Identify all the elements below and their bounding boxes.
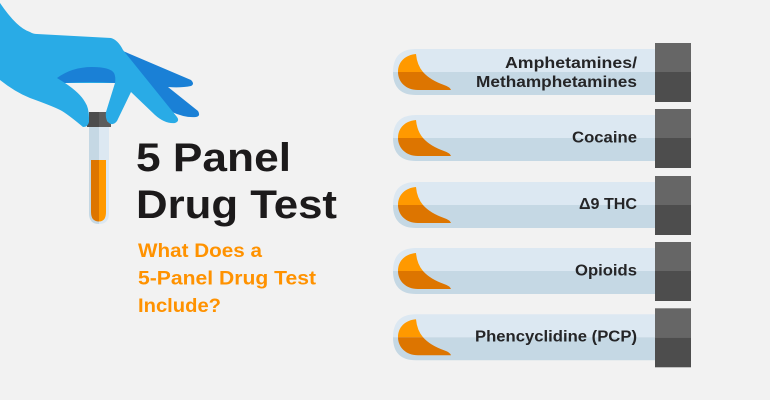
- icon: cap: [655, 109, 691, 138]
- icon: orange liquid: [398, 187, 423, 205]
- subtitle: [138, 240, 317, 317]
- icon: cap: [655, 308, 691, 337]
- panel: Cocaine: [393, 109, 691, 168]
- icon: orange liquid: [398, 319, 423, 337]
- label: Phencyclidine (PCP): [475, 329, 637, 346]
- icon: inner glove shadow: [57, 67, 115, 83]
- icon: tube body: [393, 314, 655, 337]
- icon: orange liquid: [398, 253, 423, 271]
- icon: back fingers of glove: [123, 51, 199, 117]
- subtitle: What Does a: [138, 240, 262, 262]
- panel: Amphetamines / Methamphetamines: Methamphetamines: [476, 74, 637, 91]
- icon: tube body: [393, 182, 655, 205]
- icon: cap: [655, 176, 691, 205]
- panel: Opioids: [393, 242, 691, 301]
- label: Δ9 THC: [579, 196, 637, 213]
- icon: orange liquid: [398, 120, 423, 138]
- icon: cap: [655, 242, 691, 271]
- label: Opioids: [575, 263, 637, 280]
- subtitle: 5-Panel Drug Test: [138, 268, 317, 290]
- panel: Phencyclidine (PCP): [393, 308, 691, 367]
- title line 2: Drug Test: [136, 183, 337, 227]
- icon: tube body: [393, 248, 655, 271]
- panel: THC: [393, 176, 691, 235]
- icon: orange liquid: [398, 54, 423, 72]
- panel: Amphetamines / Methamphetamines: [393, 43, 691, 102]
- icon: test tube: [87, 112, 111, 224]
- icon: tube body: [393, 49, 655, 72]
- subtitle: Include?: [138, 295, 221, 317]
- label: Amphetamines/: [505, 55, 638, 72]
- title: 5 Panel: [136, 136, 291, 180]
- illustration: gloved hand holding test tube: [0, 3, 199, 224]
- label: Cocaine: [572, 130, 637, 147]
- icon: tube body: [393, 115, 655, 138]
- icon: blue glove: [0, 3, 178, 127]
- icon: cap: [655, 43, 691, 72]
